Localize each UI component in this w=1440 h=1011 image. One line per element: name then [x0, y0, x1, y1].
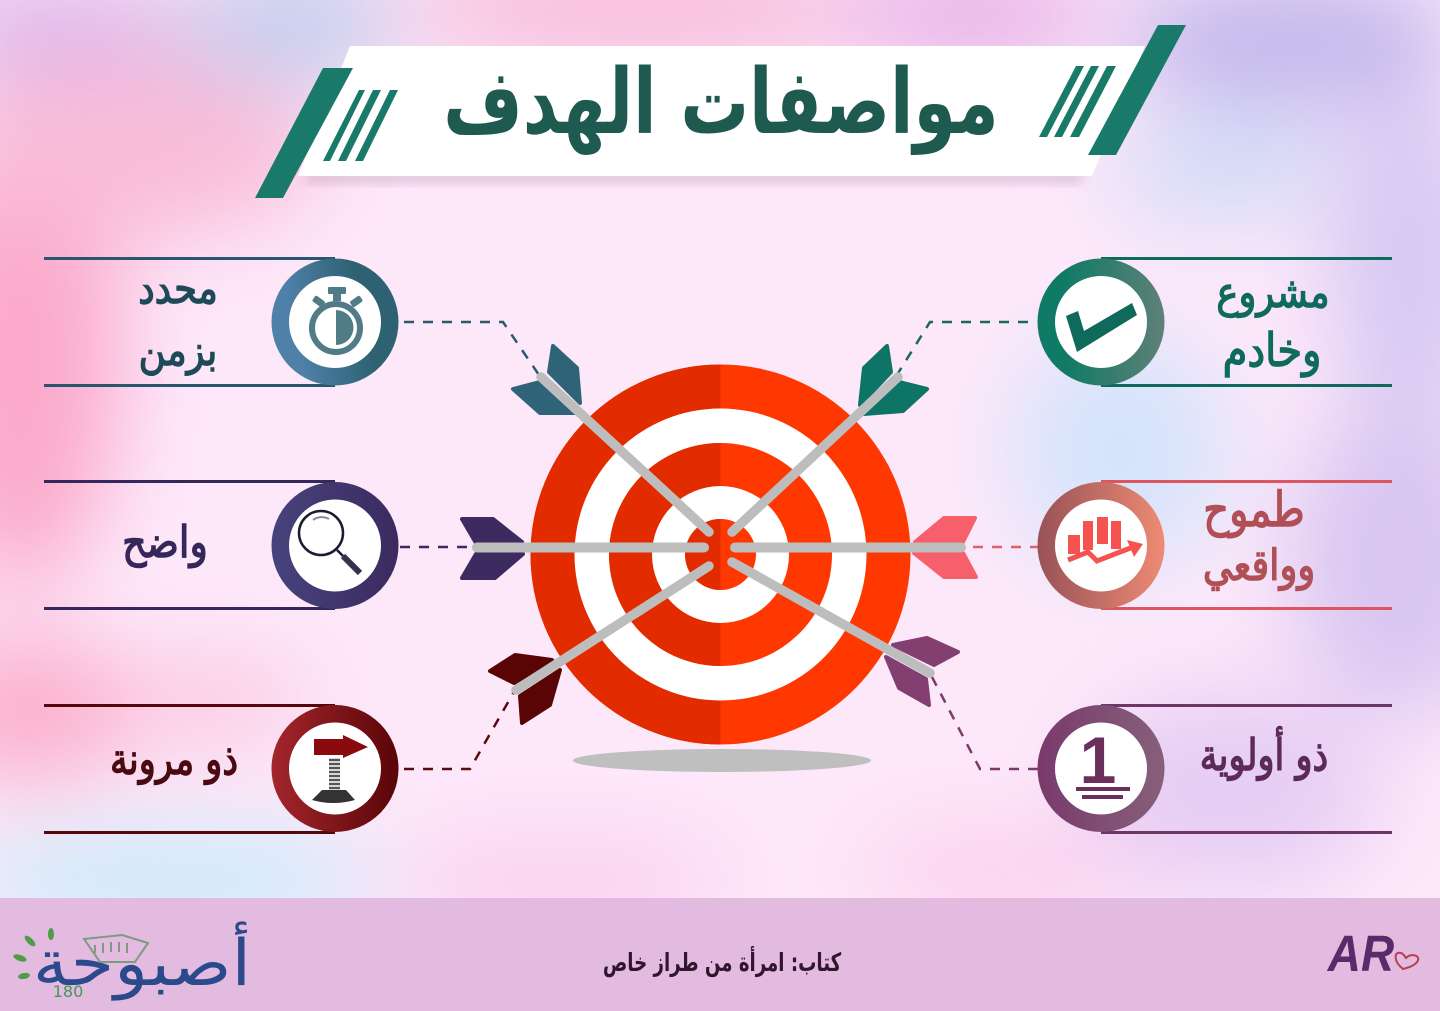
icon: magnifier — [299, 511, 360, 573]
badge — [272, 482, 398, 609]
banner white band — [298, 46, 1145, 176]
rules — [1101, 482, 1392, 608]
badge — [1038, 258, 1164, 386]
item: ambitious and realistic — [1038, 482, 1392, 609]
label: محدد — [138, 265, 218, 314]
label: ذو أولوية — [1200, 727, 1328, 781]
logo building — [84, 935, 148, 962]
icon: number one: 1 — [1080, 723, 1116, 797]
dashed connectors — [400, 322, 1040, 769]
arrow: left — [462, 519, 704, 578]
right bar — [1088, 25, 1186, 155]
title banner — [255, 25, 1186, 198]
item: has priority — [1038, 705, 1392, 832]
rules — [1101, 258, 1392, 386]
item: legitimate project — [1038, 258, 1392, 386]
left bar — [255, 68, 353, 198]
label: ذو مرونة — [110, 735, 238, 785]
icon: spring sign — [312, 735, 368, 803]
icon: growth chart — [1068, 517, 1143, 561]
logo: Osbouha 180: 180 — [53, 982, 83, 1001]
logo leaves — [12, 928, 54, 980]
item: flexible — [44, 705, 398, 832]
footer band — [0, 898, 1440, 1011]
label line 2: وواقعي — [1203, 542, 1315, 591]
rules — [44, 706, 335, 832]
label: مشروع — [1216, 269, 1330, 318]
target shadow — [573, 749, 871, 772]
logo: Osbouha 180: أصبوحة — [33, 920, 251, 1001]
rules — [44, 482, 335, 608]
arrow: top left — [513, 346, 709, 532]
icon: stopwatch — [312, 287, 363, 352]
item: clear — [44, 482, 398, 609]
icon: check mark — [1066, 303, 1137, 352]
arrow: bottom right — [732, 562, 958, 705]
badge — [1038, 482, 1164, 609]
right stripes — [1039, 66, 1116, 137]
footer citation: كتاب: امرأة من طراز خاص — [603, 945, 841, 978]
badge — [1038, 705, 1164, 832]
logo: AR heart: AR — [1327, 926, 1394, 983]
badge — [272, 258, 398, 386]
label: طموح — [1203, 483, 1305, 538]
label line 2: وخادم — [1223, 324, 1321, 378]
left stripes — [323, 90, 398, 161]
rules — [1101, 706, 1392, 832]
arrow: bottom left — [490, 566, 709, 723]
item: time-bound — [44, 258, 398, 386]
title text: مواصفات الهدف — [443, 50, 999, 156]
arrow: right — [735, 518, 976, 577]
label: واضح — [122, 516, 208, 568]
badge — [272, 705, 398, 832]
arrow: top right — [732, 346, 927, 532]
icon: number one — [1076, 723, 1130, 799]
target — [530, 364, 910, 744]
rules — [44, 258, 335, 386]
label line 2: بزمن — [139, 327, 217, 376]
target rings — [530, 364, 910, 744]
banner shadow — [304, 172, 1085, 184]
